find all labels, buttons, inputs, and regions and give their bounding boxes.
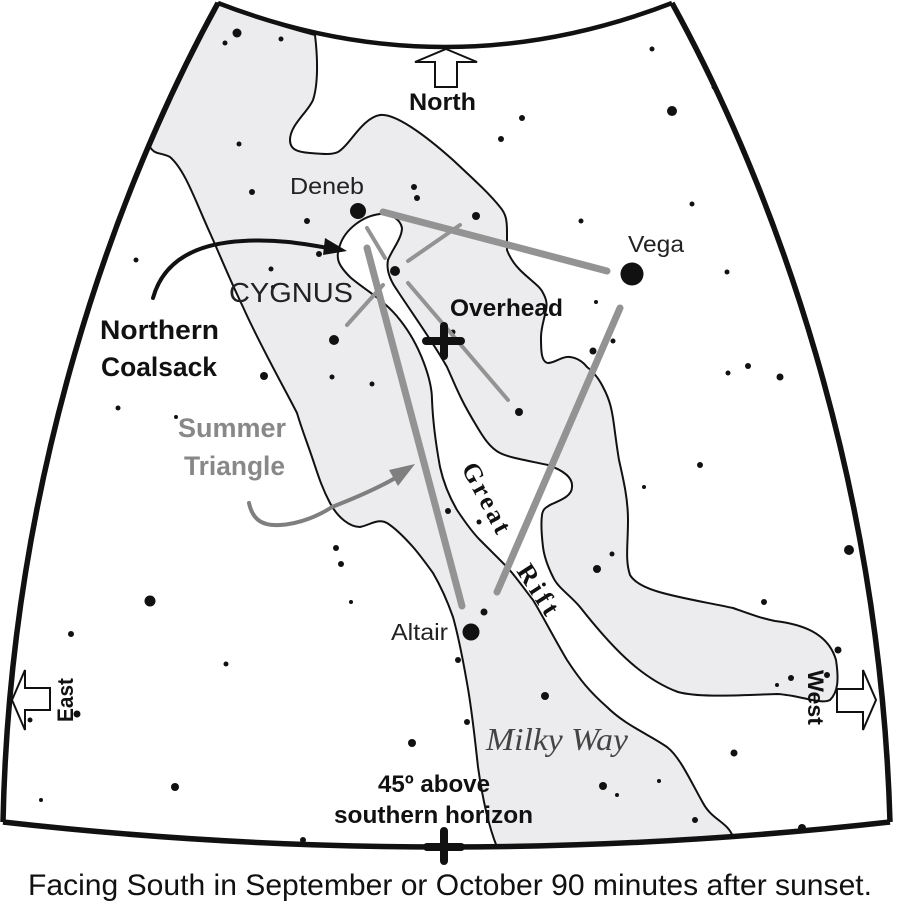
label: Summer Triangle: Summer [178,413,286,443]
label: Vega: Vega [628,231,684,257]
west arrow [837,670,876,730]
label: 45 degrees above southern horizon [334,771,533,829]
label: 45 degrees above southern horizon: 45º above [378,771,490,798]
Milky Way band with Great Rift [150,3,838,847]
label: Deneb: Deneb [290,173,364,199]
Summer Triangle arrow [249,464,415,525]
horizon cross [427,831,461,861]
label: Summer Triangle: Triangle [184,451,285,481]
overhead cross [426,326,461,356]
label: Northern Coalsack: Coalsack [101,352,218,382]
Summer Triangle lines [367,212,620,606]
Cygnus constellation lines [347,225,508,400]
label: CYGNUS: CYGNUS [229,277,353,308]
label: North: North [409,89,476,116]
label: Altair: Altair [391,619,448,645]
caption: Facing South in September or October 90 minutes after sunset. [28,869,872,902]
star: Altair [462,624,480,640]
label: 45 degrees above southern horizon: southern horizon [334,802,533,829]
label: Great: Great [456,457,519,541]
label: West: West [803,670,828,726]
label: Summer Triangle [178,413,286,481]
label: Overhead: Overhead [450,295,563,322]
star: Deneb [350,203,366,219]
star: Sadr [390,266,400,276]
label: East: East [53,677,78,722]
north arrow [415,49,477,87]
label: Northern Coalsack [100,315,219,382]
Northern Coalsack arrow [153,238,347,298]
label: Rift: Rift [511,558,568,624]
east arrow [12,670,50,730]
star: Vega [620,262,644,286]
label: Northern Coalsack: Northern [100,315,219,345]
label: Milky Way: Milky Way [485,721,629,757]
